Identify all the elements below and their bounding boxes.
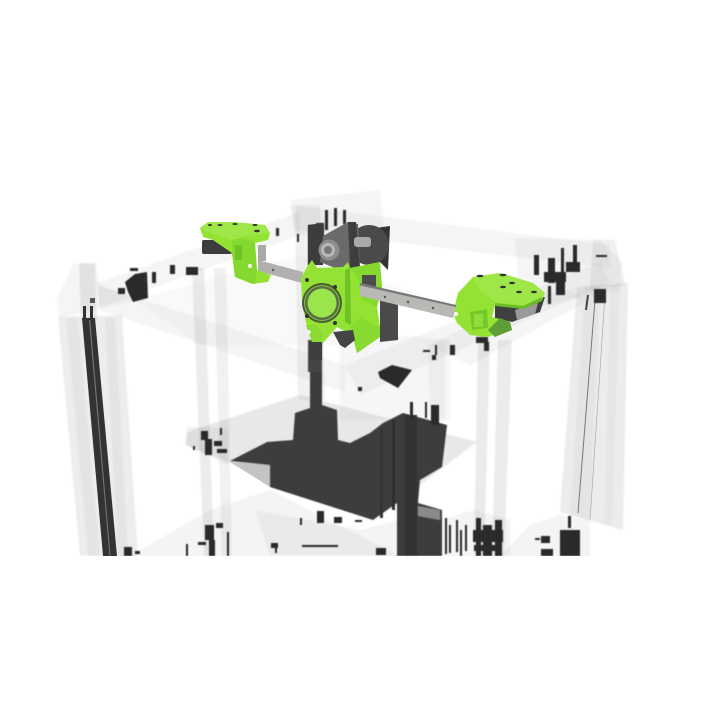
left carriage: dark linear block — [202, 240, 266, 261]
fan opening — [302, 283, 342, 323]
top-left idler cluster — [118, 265, 198, 302]
small dark mechanical parts — [118, 208, 607, 556]
right carriage: green bracket — [453, 273, 545, 337]
frame: dark left extrusion — [82, 298, 117, 556]
bottom-left cluster — [124, 523, 229, 556]
bottom middle parts — [271, 511, 386, 555]
rear top cluster — [308, 208, 346, 265]
extruder body — [318, 222, 371, 272]
frame: left corner post — [58, 263, 138, 556]
frame: bottom base — [130, 490, 590, 556]
left carriage: green bracket — [200, 222, 271, 284]
bed left cluster — [193, 428, 227, 455]
linear rail: right section — [360, 283, 456, 318]
print bed plate — [185, 395, 476, 487]
bottom right screw block — [445, 518, 503, 556]
nozzle duct below toolhead — [312, 342, 322, 360]
frame: translucent top beams — [57, 190, 622, 395]
illustration: translucent 3D printer with green gantry parts — [58, 191, 628, 556]
frame: right corner post — [560, 240, 628, 530]
gantry: dark rear parts behind the toolhead — [308, 223, 398, 342]
joints along the back beams — [276, 228, 489, 360]
frame: vertical lead screws and rear posts — [192, 205, 512, 556]
bottom far-right cluster — [535, 516, 580, 556]
mid motor cluster — [358, 365, 439, 425]
top-right motor cluster — [534, 245, 607, 304]
toolhead: green shroud with fan — [301, 260, 382, 353]
bed shadow and dark central column — [230, 340, 447, 556]
right carriage: dark linear block — [495, 297, 545, 322]
linear rail: left section — [258, 260, 303, 283]
